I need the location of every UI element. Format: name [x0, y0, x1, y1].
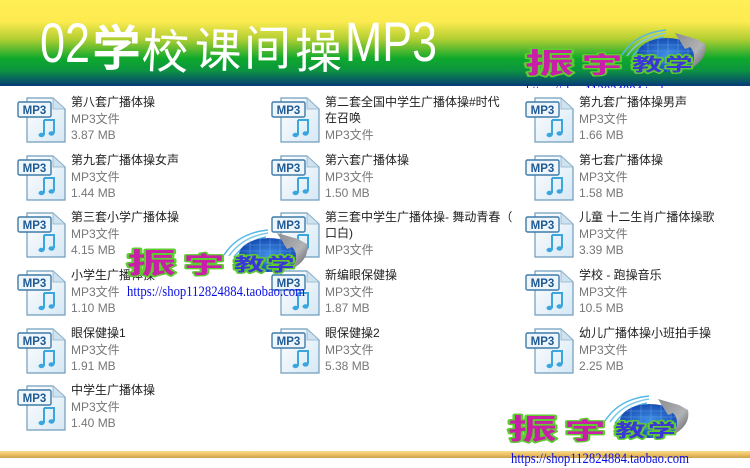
file item: 眼保健操2 [272, 325, 380, 373]
file item: 眼保健操2: MP3文件 [325, 342, 374, 357]
file item: 第三套小学广播体操: 4.15 MB [71, 243, 116, 257]
file item: 第六套广播体操: MP3文件 [325, 169, 374, 184]
file item: 中学生广播体操 [18, 382, 155, 430]
file item: 第九套广播体操男声: MP3文件 [579, 111, 628, 126]
file item: 小学生广播体操: 小学生广播体操 [71, 267, 155, 282]
file item: 第九套广播体操女声: MP3文件 [71, 169, 120, 184]
title: 课 [194, 11, 243, 82]
logo: bottom right watermark [508, 396, 690, 467]
file item: 第七套广播体操: 1.58 MB [579, 186, 624, 200]
title: 间 [244, 10, 291, 79]
logo: bottom right watermark: https://shop112824884.taobao.com [511, 451, 690, 467]
file item: 第二套全国中学生广播体操: MP3文件 [325, 127, 374, 142]
file item: 第九套广播体操男声: 1.66 MB [579, 128, 624, 142]
file item: 中学生广播体操: 1.40 MB [71, 416, 116, 430]
file item: 第八套广播体操: 3.87 MB [71, 128, 116, 142]
file item: 第七套广播体操: 第七套广播体操 [579, 152, 663, 167]
file item: 第八套广播体操: 第八套广播体操 [71, 94, 155, 109]
logo: center watermark [127, 230, 307, 300]
file item: 眼保健操2: 眼保健操2 [325, 325, 380, 340]
file item: 新编眼保健操: 1.87 MB [325, 301, 370, 315]
file item: 新编眼保健操 [272, 267, 397, 315]
file item: 第三套中学生广播体操: 第三套中学生广播体操- 舞动青春（ [325, 209, 512, 224]
file item: 中学生广播体操: 中学生广播体操 [71, 382, 155, 397]
file item: 第二套全国中学生广播体操 [272, 94, 500, 142]
file item: 儿童十二生肖广播体操歌 [526, 209, 714, 257]
file item: 眼保健操1: 1.91 MB [71, 359, 116, 373]
file item: 儿童十二生肖广播体操歌: 3.39 MB [579, 243, 624, 257]
file item: 第三套小学广播体操: MP3文件 [71, 226, 120, 241]
file item: 第三套小学广播体操 [18, 209, 179, 257]
file item: 学校 - 跑操音乐: MP3文件 [579, 284, 628, 299]
file item: 第三套中学生广播体操: MP3文件 [325, 242, 374, 257]
header banner background [0, 0, 750, 86]
file item: 第三套中学生广播体操: 口白) [325, 225, 353, 240]
file item: 小学生广播体操: 1.10 MB [71, 301, 116, 315]
file item: 中学生广播体操: MP3文件 [71, 399, 120, 414]
file item: 幼儿广播体操小班拍手操: MP3文件 [579, 342, 628, 357]
file item: 第二套全国中学生广播体操: 在召唤 [325, 111, 361, 125]
file item: 学校 - 跑操音乐: 10.5 MB [579, 301, 624, 315]
file item: 新编眼保健操: 新编眼保健操 [325, 267, 397, 282]
file item: 学校 - 跑操音乐 [526, 267, 662, 315]
file item: 第六套广播体操 [272, 152, 409, 200]
title: 校 [140, 12, 191, 83]
file item: 第八套广播体操 [18, 94, 155, 142]
file item: 第八套广播体操: MP3文件 [71, 111, 120, 126]
logo: center watermark: https://shop112824884.taobao.com [127, 284, 306, 300]
file item: 第三套小学广播体操: 第三套小学广播体操 [71, 209, 179, 224]
file item: 幼儿广播体操小班拍手操 [526, 325, 711, 373]
file item: 第七套广播体操: MP3文件 [579, 169, 628, 184]
file item: 眼保健操1: 眼保健操1 [71, 325, 126, 340]
file item: 第三套中学生广播体操 [272, 209, 512, 257]
file item: 眼保健操1: MP3文件 [71, 342, 120, 357]
file item: 第九套广播体操男声: 第九套广播体操男声 [579, 94, 687, 109]
file item: 小学生广播体操: MP3文件 [71, 284, 120, 299]
file item: 眼保健操2: 5.38 MB [325, 359, 370, 373]
title: 操 [295, 13, 342, 82]
logo: header watermark [524, 29, 706, 88]
file item: 第九套广播体操女声 [18, 152, 179, 200]
title: 学 [93, 10, 140, 79]
file item: 儿童十二生肖广播体操歌: 儿童 十二生肖广播体操歌 [579, 209, 714, 224]
bottom bar [0, 451, 750, 458]
title: MP3 [345, 10, 437, 73]
file item: 第七套广播体操 [526, 152, 663, 200]
file grid [18, 94, 714, 430]
title: 02 [40, 11, 90, 74]
file item: 第六套广播体操: 第六套广播体操 [325, 152, 409, 167]
file item: 第九套广播体操女声: 第九套广播体操女声 [71, 152, 179, 167]
file item: 第九套广播体操男声 [526, 94, 687, 142]
file item: 第九套广播体操女声: 1.44 MB [71, 186, 116, 200]
logo: header watermark: https://shop112824884.taobao.com [526, 83, 705, 99]
title [40, 10, 437, 83]
file item: 第二套全国中学生广播体操: 第二套全国中学生广播体操#时代 [325, 94, 500, 109]
file item: 眼保健操1 [18, 325, 126, 373]
file item: 幼儿广播体操小班拍手操: 2.25 MB [579, 359, 624, 373]
file item: 儿童十二生肖广播体操歌: MP3文件 [579, 226, 628, 241]
white list area [0, 86, 750, 451]
file item: 第六套广播体操: 1.50 MB [325, 186, 370, 200]
file item: 新编眼保健操: MP3文件 [325, 284, 374, 299]
file item: 幼儿广播体操小班拍手操: 幼儿广播体操小班拍手操 [579, 325, 711, 340]
file item: 学校 - 跑操音乐: 学校 - 跑操音乐 [579, 267, 662, 282]
file item: 小学生广播体操 [18, 267, 155, 315]
